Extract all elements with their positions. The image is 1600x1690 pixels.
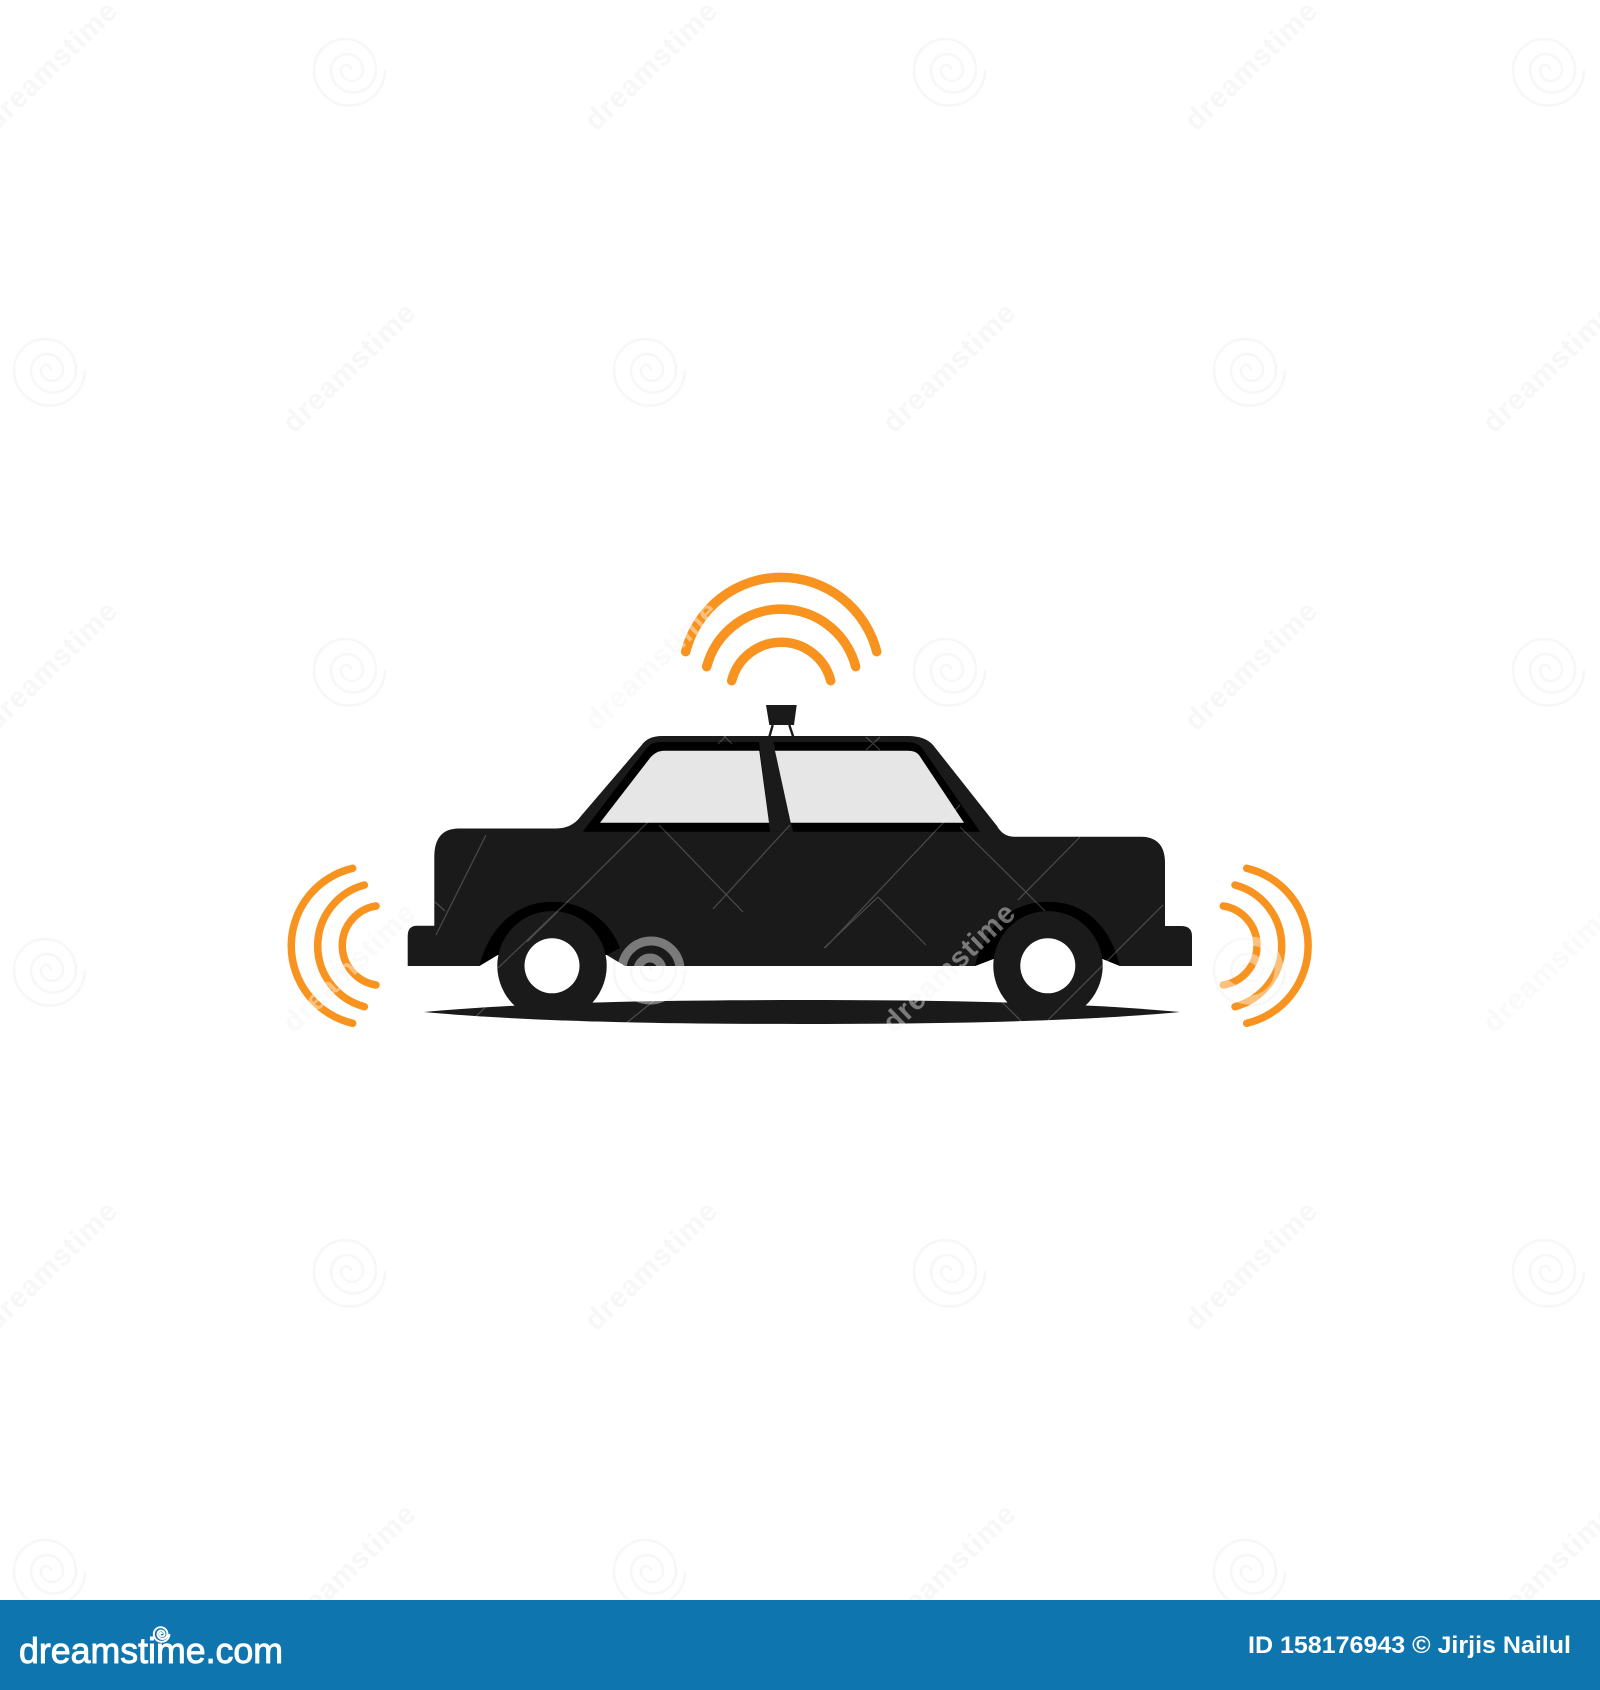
watermark pattern: dreamstime: [1179, 1195, 1324, 1337]
front wheel: [479, 902, 620, 1010]
watermark overlay on artwork: dreamstime: [579, 595, 724, 737]
watermark pattern: dreamstime: [579, 595, 724, 737]
ground shadow: [424, 1000, 1180, 1024]
watermark pattern: dreamstime: [277, 1498, 422, 1640]
left window: [600, 751, 769, 823]
watermark overlay on artwork: [277, 595, 1600, 1039]
watermark overlay on artwork: dreamstime: [277, 897, 422, 1039]
watermark pattern: dreamstime: [579, 1195, 724, 1337]
image credit: ID 158176943 © Jirjis Nailul: [1248, 1632, 1571, 1659]
icon: logo spiral: [154, 1627, 169, 1642]
watermark pattern: dreamstime: [877, 297, 1022, 439]
watermark pattern: dreamstime: [277, 897, 422, 1039]
logo wordmark: dreamstime.com: [19, 1630, 283, 1671]
footer logo: [19, 1627, 283, 1671]
right window: [775, 751, 964, 823]
rear wheel: [975, 902, 1120, 1010]
watermark pattern: dreamstime: [877, 897, 1022, 1039]
icon: right signal waves: [1223, 868, 1308, 1023]
watermark overlay on artwork: dreamstime: [877, 897, 1022, 1039]
watermark pattern: dreamstime: [277, 297, 422, 439]
icon: top signal waves: [686, 577, 877, 681]
roof sensor: [766, 705, 797, 737]
watermark pattern: dreamstime: [1179, 595, 1324, 737]
footer bar: [0, 1600, 1600, 1690]
car: [408, 705, 1192, 1010]
watermark pattern: dreamstime: [877, 1498, 1022, 1640]
door pillar: [759, 742, 793, 832]
window frame: [583, 742, 980, 832]
icon: left signal waves: [291, 868, 376, 1023]
car body: [408, 736, 1192, 966]
